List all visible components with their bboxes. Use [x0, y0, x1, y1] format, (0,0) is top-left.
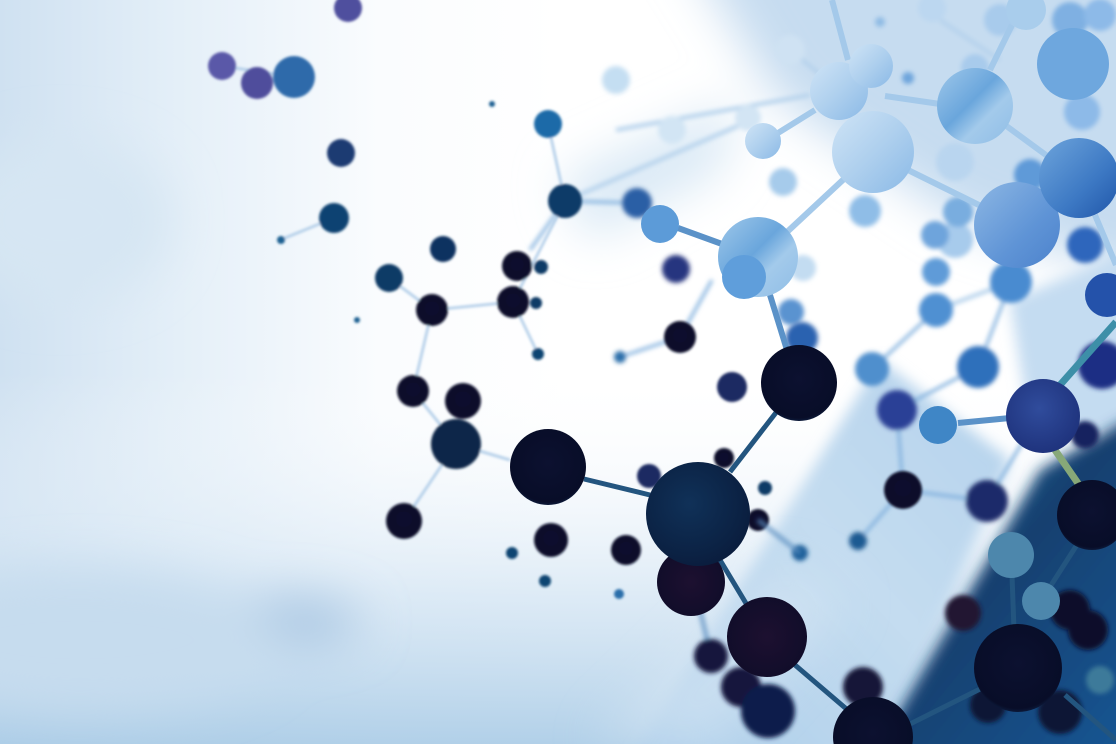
left small molecule cluster: [208, 0, 922, 599]
far background pale molecules: [565, 0, 1116, 325]
foreground bonds: [584, 0, 1116, 740]
mid-distance blue atoms: [530, 188, 1116, 561]
lower dark background atoms: [694, 520, 1114, 738]
foreground light blue atoms: [641, 0, 1116, 620]
foreground dark atoms: [510, 345, 1116, 744]
